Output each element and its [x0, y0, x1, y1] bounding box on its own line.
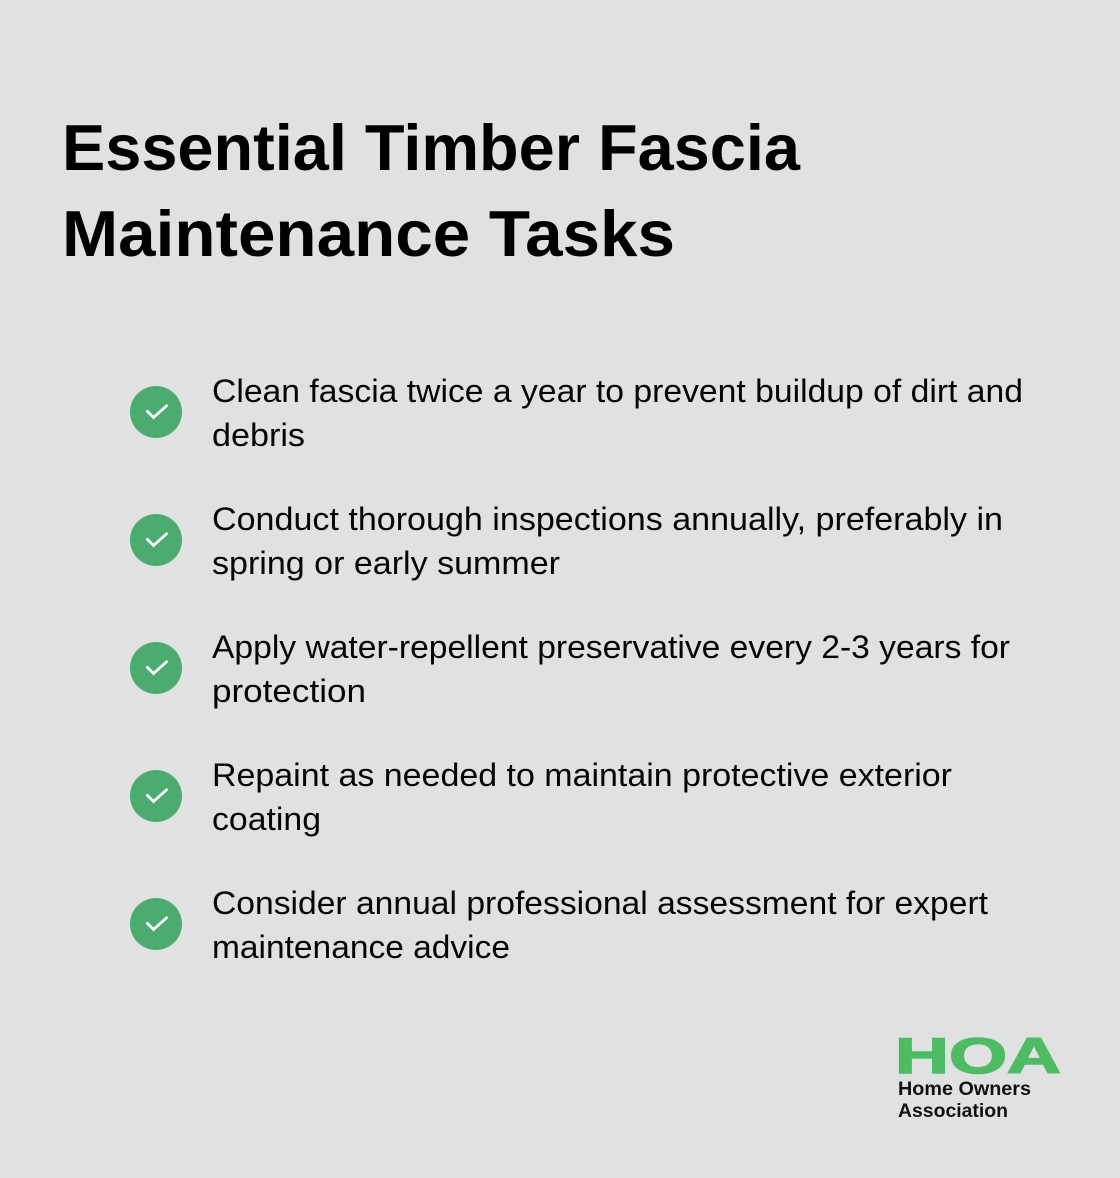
title: Essential Timber Fascia	[62, 111, 801, 184]
checklist	[130, 373, 1023, 965]
item: professional assessment: Consider annual professional assessment for expert	[212, 885, 988, 921]
item: clean fascia: Clean fascia twice a year to prevent buildup of dirt and	[212, 373, 1023, 409]
item: preservative	[130, 629, 1010, 709]
item: professional assessment	[130, 885, 988, 965]
item: clean fascia: debris	[212, 417, 305, 453]
item: inspections: Conduct thorough inspections annually, preferably in	[212, 501, 1003, 537]
item: repaint	[130, 757, 952, 837]
logo: HOA Home Owners Association: HOA	[895, 1028, 1061, 1084]
item: repaint: coating	[212, 801, 321, 837]
title: Maintenance Tasks	[62, 197, 675, 270]
item: professional assessment: maintenance advice	[212, 929, 510, 965]
item: inspections	[130, 501, 1003, 581]
title	[62, 111, 801, 270]
item: inspections: spring or early summer	[212, 545, 560, 581]
item: clean fascia	[130, 373, 1023, 453]
item: repaint: Repaint as needed to maintain protective exterior	[212, 757, 952, 793]
item: preservative: Apply water-repellent preservative every 2-3 years for	[212, 629, 1010, 665]
logo: HOA Home Owners Association: Home Owners	[898, 1079, 1031, 1100]
item: preservative: protection	[212, 673, 366, 709]
logo: HOA Home Owners Association	[895, 1028, 1061, 1122]
logo: HOA Home Owners Association: Association	[898, 1101, 1008, 1122]
